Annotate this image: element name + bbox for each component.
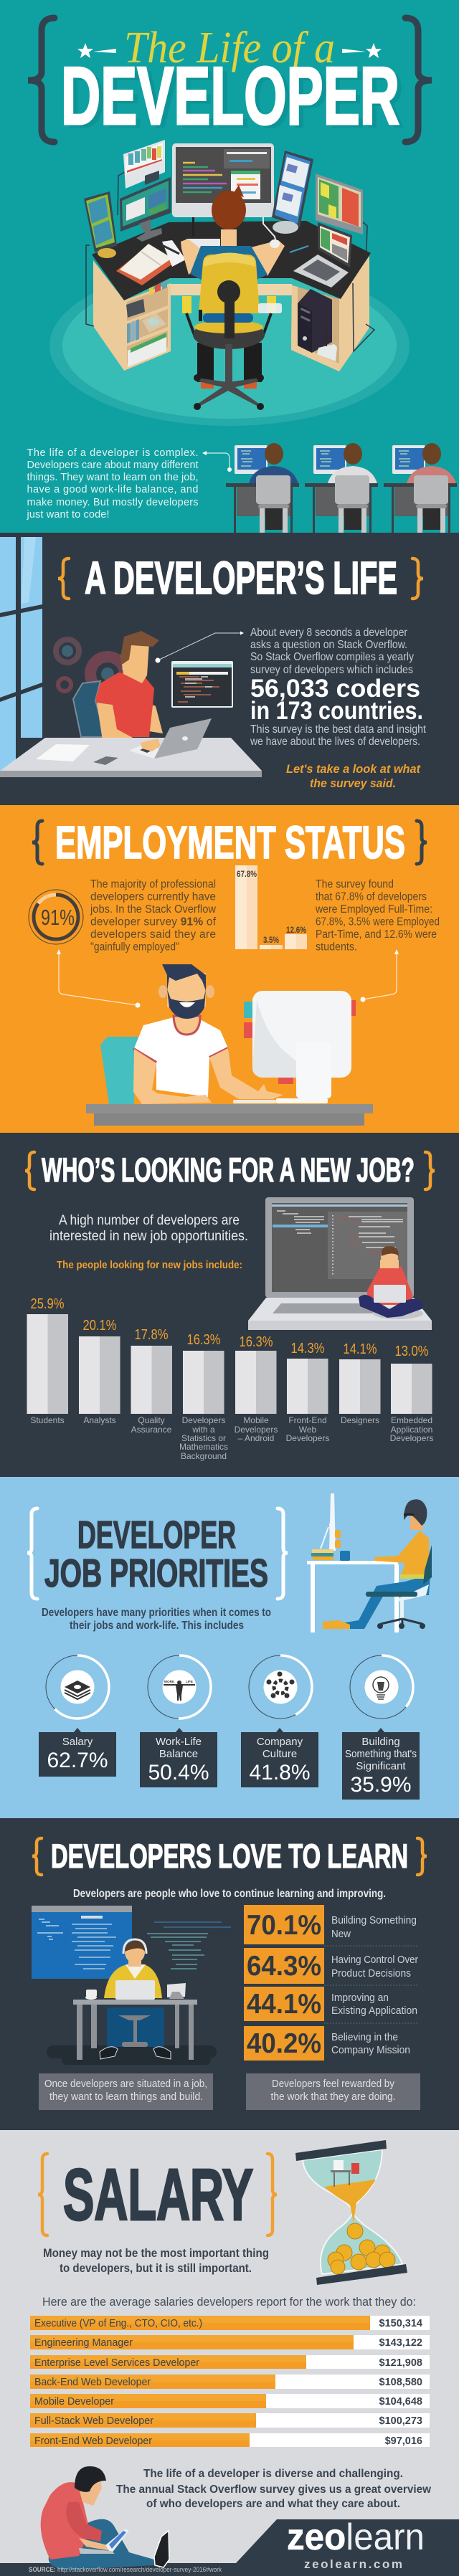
salary bars — [30, 2316, 430, 2447]
stat: believing in mission: 40.2% — [247, 2028, 321, 2059]
bar labels: Quality — [138, 1415, 165, 1425]
heading braces — [38, 2154, 277, 2235]
bar labels: Analysts — [83, 1415, 116, 1425]
text: salaries intro: Here are the average salaries developers report for the work that they do: — [42, 2295, 416, 2309]
bar labels: – Android — [238, 1433, 274, 1443]
row: back-end — [30, 2375, 430, 2389]
bar labels: Developers — [235, 1425, 278, 1435]
card: work-life balance — [140, 1728, 217, 1787]
illustration: developer at side desk — [307, 1493, 432, 1632]
bar chart: employment — [235, 865, 307, 949]
panel: intro — [0, 0, 459, 533]
bar values: 16.3% — [240, 1334, 273, 1350]
bar values: 14.3% — [291, 1341, 325, 1356]
row: mobile: Mobile Developer — [34, 2396, 114, 2408]
card: salary: 62.7% — [47, 1749, 108, 1772]
floating code — [147, 1922, 231, 1969]
bar chart: employment: 12.6% — [286, 925, 306, 935]
ring: work-life: WORK — [164, 1680, 175, 1683]
bar labels: Application — [391, 1425, 432, 1435]
callout — [286, 762, 421, 790]
desk top — [92, 221, 371, 300]
ring: work-life: LIFE — [186, 1680, 193, 1683]
stat: building something new — [244, 1905, 417, 1944]
footer banner — [0, 2519, 459, 2576]
small developers — [226, 443, 457, 533]
bar labels: Students — [30, 1415, 65, 1425]
bar values — [30, 1296, 429, 1359]
stat: having control: Having Control Over — [331, 1954, 418, 1966]
heading braces — [25, 1152, 435, 1189]
employment text — [90, 878, 217, 954]
card: building something significant: Significant — [356, 1760, 406, 1772]
illustration: person on laptop — [359, 1246, 423, 1319]
logo: zeolearn.com — [304, 2557, 402, 2571]
window — [0, 537, 42, 774]
survey text: we have about the lives of developers. — [250, 736, 420, 748]
note: right — [246, 2073, 420, 2110]
stat: improving an application: Existing Application — [331, 2005, 417, 2017]
intro text — [26, 447, 198, 521]
priority cards — [39, 1728, 420, 1800]
closing text: The annual Stack Overflow survey gives us a great overview — [116, 2484, 432, 2496]
laptop — [293, 222, 352, 287]
subheading: their jobs and work-life. This includes — [70, 1620, 244, 1632]
card: building something significant: Building — [361, 1736, 400, 1748]
bar labels: Background — [181, 1451, 227, 1461]
intro text: A high number of developers are — [59, 1213, 240, 1228]
bar values: 16.3% — [186, 1332, 221, 1348]
closing text: of who developers are and what they care about. — [146, 2498, 400, 2510]
callout: the survey said. — [310, 776, 396, 790]
card: company culture: 41.8% — [249, 1761, 311, 1784]
text: money: Money may not be the most important thing — [43, 2247, 269, 2260]
panel: employment status — [0, 805, 459, 1133]
employment text: developers currently have — [90, 890, 216, 903]
stat: having control: 64.3% — [247, 1951, 321, 1982]
stat: building something new: 70.1% — [247, 1910, 321, 1941]
logo: zeolearn — [287, 2516, 425, 2558]
row: engineering manager: Engineering Manager — [34, 2337, 133, 2349]
row: enterprise — [30, 2355, 430, 2369]
donut chart: 91% — [29, 890, 83, 944]
title: stars and dashes — [77, 43, 382, 58]
panel: salary — [0, 2130, 459, 2576]
row: full-stack — [30, 2413, 430, 2428]
card: salary — [39, 1728, 116, 1777]
ring: salary — [46, 1655, 109, 1719]
big stat — [250, 675, 423, 725]
survey text: that 67.8% of developers — [316, 890, 427, 903]
closing text: The life of a developer is diverse and challenging. — [143, 2468, 403, 2480]
illustration: hourglass — [295, 2140, 407, 2285]
bar values: 17.8% — [135, 1327, 169, 1343]
panel: developer job priorities — [0, 1477, 459, 1818]
text: money: to developers, but it is still important. — [60, 2262, 252, 2275]
card: work-life balance: 50.4% — [148, 1761, 209, 1784]
title: the life of a: The Life of a — [124, 24, 335, 72]
intro text: things. They want to learn on the job, — [27, 472, 198, 483]
note: left — [39, 2073, 213, 2110]
priorities rings — [46, 1655, 413, 1719]
survey text: students. — [316, 941, 357, 954]
arrow: to text — [155, 631, 244, 662]
stat: believing in mission: Company Mission — [331, 2044, 410, 2056]
bar labels: Mathematics — [179, 1442, 228, 1452]
heading braces — [32, 821, 427, 864]
title: curly braces — [28, 18, 432, 142]
survey text: asks a question on Stack Overflow. — [250, 639, 407, 651]
subheading: Developers are people who love to continue learning and improving. — [73, 1888, 386, 1900]
illustration: laptop — [248, 1197, 432, 1330]
stat: having control: Product Decisions — [331, 1967, 411, 1979]
bar shading — [47, 1314, 432, 1414]
survey text: This survey is the best data and insight — [250, 723, 426, 736]
card: building something significant — [342, 1728, 420, 1800]
subheading — [42, 1607, 271, 1632]
card: company culture: Company — [257, 1736, 303, 1748]
arrows — [57, 949, 399, 1008]
big stat: in 173 countries. — [250, 697, 423, 725]
row: back-end: $108,580 — [379, 2377, 422, 2388]
card: company culture: Culture — [262, 1748, 297, 1760]
row: front-end: Front-End Web Developer — [34, 2435, 152, 2447]
survey text — [250, 627, 426, 748]
cabinets — [86, 172, 374, 371]
code window — [32, 1906, 132, 1979]
card: company culture — [241, 1728, 318, 1787]
developer two — [305, 443, 378, 533]
bar chart: employment: 3.5% — [263, 935, 279, 945]
donut chart: 91%: 91% — [41, 905, 75, 930]
card: work-life balance: Balance — [159, 1748, 198, 1760]
heading braces — [27, 1508, 288, 1599]
note: right: the work that they are doing. — [271, 2091, 396, 2103]
illustration: developer with headphones — [73, 1939, 197, 2060]
bar labels: Web — [299, 1425, 317, 1435]
bar labels: Statistics or — [181, 1433, 226, 1443]
text: money — [43, 2247, 269, 2275]
row: front-end: $97,016 — [385, 2435, 422, 2447]
panel: a developer's life — [0, 533, 459, 805]
bar labels: Mobile — [243, 1415, 269, 1425]
row: enterprise: Enterprise Level Services Developer — [34, 2357, 199, 2369]
bar chart: new job seekers — [27, 1296, 433, 1461]
card: building something significant: Something that's — [345, 1748, 417, 1760]
card: building something significant: 35.9% — [350, 1773, 412, 1797]
survey text: were Employed Full-Time: — [315, 903, 432, 916]
stat: improving an application — [244, 1987, 417, 2021]
heading: DEVELOPER — [77, 1513, 236, 1556]
stats list — [244, 1905, 419, 2061]
survey text — [315, 878, 440, 954]
stat: having control — [244, 1948, 418, 1984]
keyboard — [186, 239, 220, 255]
code window — [171, 661, 233, 708]
panel: who's looking for a new job — [0, 1133, 459, 1477]
illustration: bearded developer — [100, 964, 283, 1104]
employment text: developers said they are — [90, 928, 216, 941]
card: salary: Salary — [62, 1736, 93, 1748]
illustration: man with laptop — [73, 631, 163, 751]
heading braces — [58, 559, 423, 599]
survey text: Part-Time, and 12.6% were — [316, 928, 437, 941]
callout: Let's take a look at what — [286, 762, 421, 776]
row: executive: $150,314 — [379, 2318, 422, 2329]
survey text: About every 8 seconds a developer — [250, 627, 408, 639]
intro text: have a good work-life balance, and — [27, 484, 198, 495]
panel: developers love to learn — [0, 1818, 459, 2130]
bar chart: employment: 67.8% — [237, 869, 257, 879]
developer three — [384, 443, 457, 533]
row: mobile: $104,648 — [379, 2396, 422, 2408]
heading braces — [32, 1838, 427, 1875]
bar labels: Embedded — [391, 1415, 432, 1425]
illustration: gears — [56, 640, 125, 691]
illustration: person with laptop on floor — [41, 2466, 169, 2570]
card: work-life balance: Work-Life — [156, 1736, 202, 1748]
intro text: just want to code! — [26, 509, 109, 521]
bar labels: Assurance — [131, 1425, 172, 1435]
stat: improving an application: Improving an — [331, 1992, 389, 2004]
note: left: they want to learn things and build. — [49, 2091, 203, 2103]
bar values: 13.0% — [394, 1344, 429, 1359]
bar values: 14.1% — [343, 1341, 377, 1357]
ring: work-life — [148, 1655, 211, 1719]
bar values: 25.9% — [30, 1296, 65, 1312]
bars — [27, 1314, 412, 1414]
monitors — [84, 140, 363, 258]
row: front-end — [30, 2433, 430, 2447]
row: mobile — [30, 2394, 430, 2408]
ring: company culture — [249, 1655, 312, 1719]
survey text: The survey found — [316, 878, 394, 890]
office chair — [182, 252, 282, 410]
row: engineering manager — [30, 2335, 430, 2349]
row: executive — [30, 2316, 430, 2330]
heading: SALARY — [63, 2155, 253, 2235]
row: full-stack: Full-Stack Web Developer — [34, 2415, 153, 2427]
stat: building something new: New — [331, 1928, 351, 1940]
stat: improving an application: 44.1% — [247, 1989, 321, 2020]
bar labels: Developers — [286, 1433, 329, 1443]
stat: believing in mission: Believing in the — [331, 2031, 398, 2043]
stat: believing in mission — [244, 2026, 410, 2061]
subheading: Developers have many priorities when it comes to — [42, 1607, 271, 1619]
bar values: 20.1% — [83, 1318, 117, 1334]
row: enterprise: $121,908 — [379, 2357, 422, 2369]
source: SOURCE: http://stackoverflow.com/research/developer-survey-2016#work — [29, 2566, 222, 2574]
developer one — [226, 443, 299, 533]
bar labels: Developers — [390, 1433, 433, 1443]
big stat: 56,033 coders — [250, 675, 420, 703]
row: engineering manager: $143,122 — [379, 2337, 422, 2349]
row: executive: Executive (VP of Eng., CTO, CIO, etc.) — [34, 2318, 202, 2329]
ring: building something — [350, 1655, 413, 1719]
row: full-stack: $100,273 — [379, 2415, 422, 2427]
note: left: Once developers are situated in a job, — [44, 2078, 207, 2090]
employment text: jobs. In the Stack Overflow — [90, 903, 217, 916]
bar labels: with a — [191, 1425, 215, 1435]
intro text — [49, 1213, 248, 1244]
employment text: The majority of professional — [90, 878, 216, 890]
illustration: developer at desk — [49, 140, 410, 426]
note: right: Developers feel rewarded by — [272, 2078, 394, 2090]
desk — [0, 718, 262, 777]
employment text: "gainfully employed" — [90, 941, 179, 954]
person seen from behind — [181, 185, 285, 280]
intro text: Developers care about many different — [27, 460, 198, 471]
bar labels: Front-End — [288, 1415, 327, 1425]
subheading: The people looking for new jobs include: — [57, 1259, 242, 1271]
desk — [86, 1104, 373, 1126]
heading: JOB PRIORITIES — [44, 1551, 268, 1595]
illustration: monitor — [233, 991, 356, 1103]
bar labels — [30, 1415, 433, 1461]
intro text: interested in new job opportunities. — [49, 1229, 248, 1244]
survey text: 67.8%, 3.5% were Employed — [316, 916, 440, 928]
survey text: So Stack Overflow compiles a yearly — [250, 651, 414, 663]
intro text: The life of a developer is complex. — [27, 447, 198, 459]
closing text — [116, 2468, 432, 2510]
book — [116, 240, 186, 285]
arrow: to intro text — [202, 451, 232, 472]
bar labels: Designers — [341, 1415, 379, 1425]
floor shadow — [47, 2045, 217, 2065]
row: back-end: Back-End Web Developer — [34, 2377, 151, 2388]
stat: building something new: Building Something — [331, 1914, 417, 1926]
bar labels: Developers — [182, 1415, 225, 1425]
intro text: make money. But mostly developers — [27, 497, 198, 508]
heading — [44, 1513, 268, 1595]
survey text: survey of developers which includes — [250, 664, 413, 676]
employment text: developer survey 91% of — [90, 916, 217, 928]
